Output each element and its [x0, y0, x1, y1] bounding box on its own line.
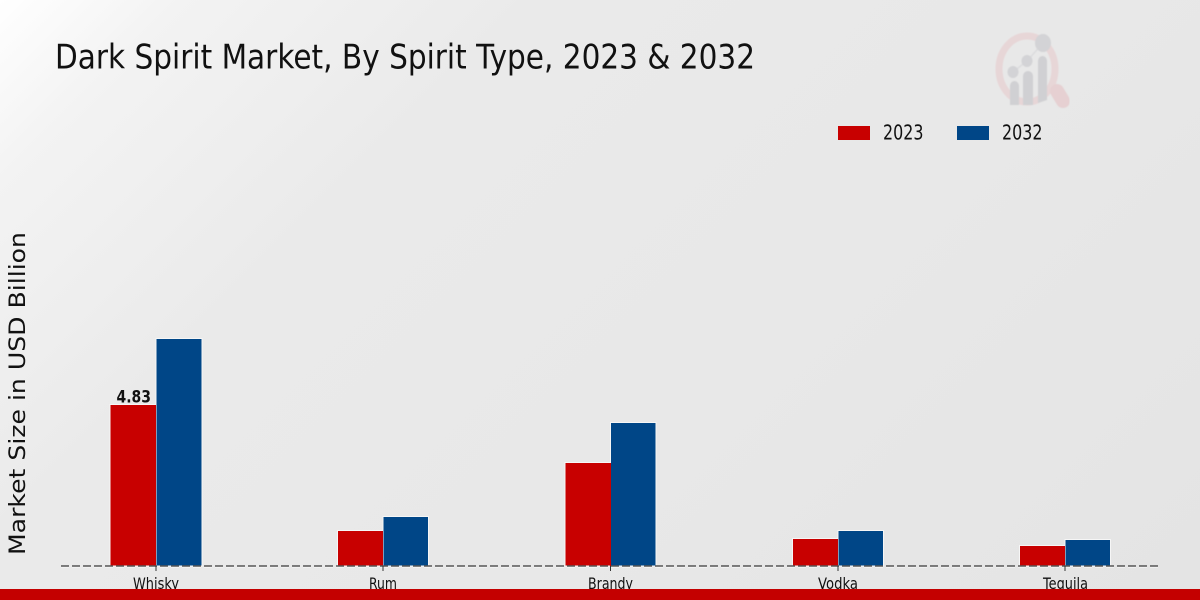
bar group: Rum [338, 516, 428, 566]
x axis category labels: Whisky [133, 574, 179, 593]
bar group: Brandy [565, 422, 656, 566]
value label: Whisky 2023: 4.83 [116, 388, 151, 408]
x axis category labels: Tequila [1042, 574, 1088, 593]
x axis category labels: Brandy [588, 574, 633, 593]
bar group: Tequila [1020, 540, 1110, 566]
x axis category labels [133, 566, 1088, 593]
x axis category labels: Vodka [818, 574, 858, 593]
y axis label: Market Size in USD Billion [5, 232, 31, 555]
bar group: Whisky [110, 338, 202, 566]
legend item: 2032: 2032 [1002, 120, 1042, 144]
bar chart [110, 338, 1110, 566]
legend item: 2032 [957, 120, 1042, 144]
x axis category labels: Rum [369, 574, 397, 593]
x axis baseline [61, 566, 1159, 567]
bar group: Vodka [792, 530, 884, 566]
footer bar [0, 589, 1200, 600]
icon: watermark logo [999, 34, 1063, 105]
title: Dark Spirit Market, By Spirit Type, 2023 & 2032 [55, 38, 755, 78]
legend item: 2023: 2023 [883, 120, 924, 144]
legend [838, 120, 1042, 144]
legend item: 2023 [838, 120, 924, 144]
